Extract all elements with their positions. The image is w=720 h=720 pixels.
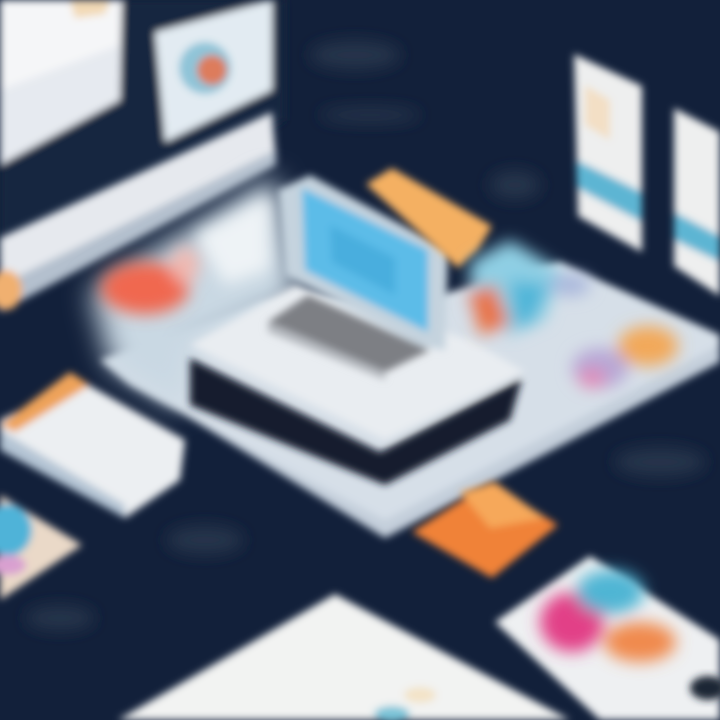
faint dark-panel text blocks [26,41,705,630]
panel: left glass surface [90,175,300,410]
icon: blue and orange cube [468,240,590,335]
card: color wheel [495,556,720,720]
icon: laptop [268,175,448,380]
panel: central platform [190,285,525,485]
card: bottom-left swatch [0,495,82,600]
icon: orange bar [366,168,492,268]
card: bottom white document [118,594,570,720]
panel: white shelf band [0,112,276,312]
panel: top-left monitor [0,0,285,260]
panel: right phone cards [574,54,720,296]
icon: orange tile [412,482,558,578]
panel: left glass highlight [195,195,270,285]
panel: lower platform [100,262,720,538]
icon: red chart at left [101,247,199,314]
card: left document [0,372,185,518]
icon: pie swatch right [572,326,678,388]
